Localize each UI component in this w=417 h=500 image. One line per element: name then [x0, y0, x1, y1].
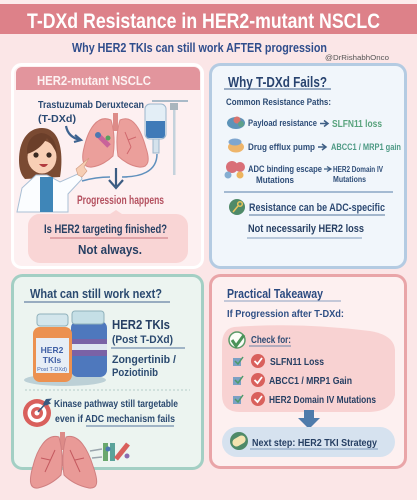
row: ABCC1: [233, 373, 352, 387]
row: ABCC1: ABCC1 / MRP1 Gain: [269, 375, 352, 387]
drug label: [38, 100, 144, 125]
checklist: [222, 325, 395, 412]
panel: Why T-DXd Fails: [210, 64, 406, 268]
icon: TKI bottles: Post T-DXd): [37, 367, 67, 373]
icon: doctor: [17, 128, 89, 212]
heading: What can still work next?: [30, 286, 162, 301]
kinase text: Kinase pathway still targetable: [54, 399, 178, 410]
progression text: Progression happens: [77, 195, 164, 207]
row: binding: Mutations: [256, 175, 294, 186]
drug label: Trastuzumab Deruxtecan: [38, 100, 144, 111]
row: SLFN11: SLFN11 Loss: [270, 356, 324, 368]
row: efflux: Drug efflux pump: [248, 142, 315, 153]
text: not HER2 loss: Not necessarily HER2 loss: [248, 223, 364, 235]
callout: Is HER2 targeting finished?: [44, 224, 167, 236]
icon: TKI bottles: TKIs: [43, 355, 61, 365]
TKI label: (Post T-DXd): [112, 334, 173, 346]
arrow: progression: [109, 168, 123, 188]
text: ADC-specific: Resistance can be ADC-specific: [249, 202, 385, 214]
row: Domain IV: HER2 Domain IV Mutations: [269, 394, 376, 406]
heading: Why T-DXd Fails?: [228, 75, 327, 91]
arrow: drug to lung: [66, 126, 81, 142]
subtitle: Why HER2 TKIs can still work AFTER progression: [72, 40, 327, 55]
TKI label: [111, 317, 185, 379]
kinase text: [54, 399, 178, 426]
next step box: [222, 427, 395, 457]
callout: Not always.: [78, 242, 142, 257]
checklist: Check for:: [251, 335, 291, 346]
row: binding: [224, 161, 384, 186]
row: payload: SLFN11 loss: [332, 118, 382, 130]
next step box: Next step: HER2 TKI Strategy: [252, 437, 377, 449]
kinase text: even if ADC mechanism fails: [55, 414, 175, 425]
subheading: Common Resistance Paths:: [226, 97, 331, 108]
row: payload: [227, 116, 382, 130]
text: not HER2 loss: [247, 223, 364, 238]
drug label: (T-DXd): [38, 114, 76, 125]
row: efflux: [228, 138, 401, 153]
arrow: to next step: [298, 410, 320, 429]
icon: lungs: [83, 113, 148, 167]
row: binding: ADC binding escape: [248, 164, 322, 175]
icon: TKI bottles: HER2: [41, 345, 64, 355]
TKI label: HER2 TKIs: [112, 317, 170, 332]
icon: TKI bottles: [24, 311, 107, 386]
row: binding: Mutations: [333, 175, 366, 184]
TKI label: Zongertinib /: [112, 354, 176, 366]
row: binding: HER2 Domain IV: [333, 165, 384, 174]
TKI label: Poziotinib: [112, 367, 158, 379]
panel: HER2-mutant NSCLC: [12, 64, 202, 268]
panel header: HER2-mutant NSCLC: [37, 74, 151, 88]
icon: big check: [229, 332, 245, 348]
panel: What can still work next: [12, 276, 202, 488]
panel header: [16, 67, 200, 90]
icon: receptor molecules: [90, 443, 130, 461]
row: Domain IV: [233, 392, 376, 406]
subheading: If Progression after T-DXd:: [227, 308, 344, 320]
handle: @DrRishabhOnco: [325, 53, 389, 62]
panel: Practical Takeaway: [210, 276, 406, 468]
icon: IV bag: [82, 101, 188, 181]
icon: lower lungs: [30, 432, 97, 488]
callout: [28, 210, 188, 263]
row: SLFN11: [233, 354, 324, 368]
row: payload: Payload resistance: [248, 118, 317, 129]
heading: Practical Takeaway: [227, 286, 324, 301]
icon: key: [229, 199, 245, 215]
icon: target: [23, 398, 52, 427]
